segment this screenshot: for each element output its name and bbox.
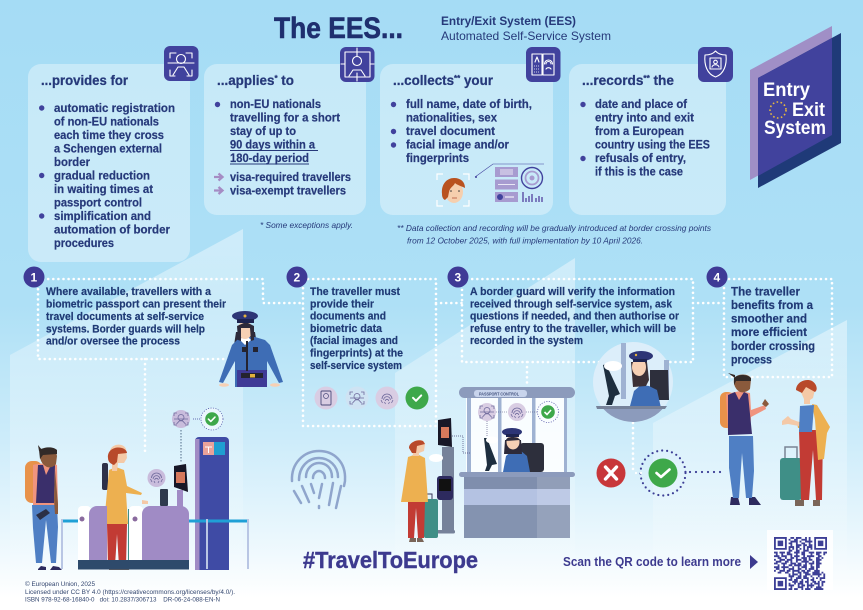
list: applies to: stay of up to	[230, 126, 296, 138]
credits: Licensed under CC BY 4.0 (https://creativecommons.org/licenses/by/4.0/).	[25, 589, 235, 596]
list: provides for	[39, 103, 175, 250]
icon: passport and fingerprint	[526, 47, 560, 82]
list: records: entry into and exit	[595, 112, 694, 124]
step 4: The traveller	[731, 286, 801, 298]
step 4: smoother and	[731, 314, 807, 326]
icon: approval check	[636, 450, 726, 496]
illustration: traveller at gate	[102, 445, 148, 570]
heading: collects: **	[454, 74, 461, 83]
step 1: Where available, travellers with a	[46, 286, 212, 298]
icon: face frame	[340, 47, 374, 82]
list: provides for: of non-EU nationals	[54, 116, 159, 128]
step 3: received through self-service system, ask	[470, 298, 673, 310]
icons: biometric steps	[314, 386, 428, 410]
list: provides for: in waiting times at	[54, 184, 153, 196]
step 4: border crossing	[731, 341, 815, 353]
illustration: face scan and data	[437, 164, 544, 206]
list: records: refusals of entry,	[595, 153, 686, 165]
traveller woman	[780, 380, 830, 506]
list: records	[580, 99, 710, 178]
illustration: border guard	[219, 311, 283, 387]
footnote: implementation dates	[397, 223, 712, 246]
list: applies to: non-EU nationals	[230, 99, 321, 111]
list: provides for: simplification and	[54, 211, 151, 223]
step 3	[448, 266, 680, 347]
icon: approved check	[201, 408, 223, 430]
arrows: travellers: visa-exempt travellers	[230, 186, 346, 198]
step 3: refuse entry to the traveller, which will be	[470, 323, 676, 335]
step 2: biometric data	[310, 323, 383, 335]
step 4: more efficient	[731, 327, 807, 339]
logo: Entry Exit System: Entry	[763, 80, 810, 101]
list: records: if this is the case	[595, 166, 683, 178]
step 2: provide their	[310, 298, 375, 310]
step 3: questions if needed, and then authorise or	[470, 311, 680, 323]
list: collects: fingerprints	[406, 153, 469, 165]
heading: collects: ...collects	[393, 73, 455, 88]
illustration: self-service gate	[62, 408, 248, 570]
footnote: implementation dates: from 12 October 2025, with full implementation by 10 April 2026.	[407, 236, 643, 246]
icon: shield	[698, 47, 733, 82]
step 3: A border guard will verify the information	[470, 286, 675, 298]
list: provides for: each time they cross	[54, 130, 164, 142]
logo: Entry Exit System	[750, 26, 841, 188]
list: collects: facial image and/or	[406, 140, 510, 152]
step 1: travel documents at self-service	[46, 311, 204, 323]
list: provides for: automation of border	[54, 224, 171, 236]
step 1	[24, 266, 227, 348]
logo: Entry Exit System: Exit	[792, 100, 826, 121]
list: records: date and place of	[595, 99, 687, 111]
illustration: happy travellers	[720, 373, 830, 506]
heading: provides for: ...provides for	[41, 73, 129, 88]
list: provides for: a Schengen external	[54, 144, 162, 156]
step 2	[286, 266, 403, 372]
list: provides for: border	[54, 157, 91, 169]
credits	[25, 580, 235, 604]
illustration: passport control booth	[459, 387, 575, 538]
arrows: travellers: visa-required travellers	[230, 172, 351, 184]
heading: records: **	[643, 74, 651, 83]
step 4: process	[731, 354, 772, 366]
heading: applies to: ...applies	[217, 73, 275, 88]
step 2: 2	[294, 270, 300, 284]
list: collects	[391, 99, 532, 165]
icon: refusal X	[596, 458, 626, 488]
background building shapes	[10, 229, 847, 610]
hashtag: #TravelToEurope	[303, 547, 478, 573]
step 3: 3	[454, 270, 462, 284]
step 2: (facial images and	[310, 335, 398, 347]
panel: collects	[380, 64, 553, 215]
tall kiosk column	[195, 437, 229, 570]
step 1: and/or oversee the process	[46, 336, 180, 348]
step 2: documents and	[310, 311, 386, 323]
list: collects: nationalities, sex	[406, 112, 498, 124]
list: applies to: travelling for a short	[230, 112, 340, 124]
list: records: country using the EES	[595, 140, 710, 152]
icon: fingerprint	[292, 451, 345, 508]
subtitle: Entry/Exit System (EES)	[441, 14, 576, 28]
step 3: recorded in the system	[470, 335, 583, 347]
panel: provides for	[28, 64, 190, 262]
QR code	[767, 530, 833, 590]
logo: Entry Exit System: System	[764, 118, 826, 139]
step 1: 1	[30, 270, 38, 284]
illustration: traveller with passport	[25, 445, 62, 570]
traveller man	[720, 373, 769, 505]
icon: face scan	[164, 46, 198, 81]
list: applies to	[215, 99, 340, 165]
step 4: benefits from a	[731, 300, 814, 312]
list: provides for: procedures	[54, 238, 114, 250]
step 1: biometric passport can present their	[46, 298, 227, 310]
list: provides for: passport control	[54, 198, 142, 210]
heading: records: ...records	[582, 73, 643, 88]
list: collects: full name, date of birth,	[406, 99, 532, 111]
credits: © European Union, 2025	[25, 580, 95, 588]
icons: booth checks	[478, 402, 558, 437]
illustration: passport control booth: PASSPORT CONTROL	[479, 392, 519, 396]
title: The EES...	[274, 12, 403, 45]
footnote: implementation dates: ** Data collection and recording will be gradually introduced at border crossing points	[397, 223, 712, 233]
list: provides for: automatic registration	[54, 103, 175, 115]
footnote: exceptions: * Some exceptions apply.	[260, 220, 353, 230]
step 2: fingerprints) at the	[310, 348, 403, 360]
icon: fingerprint bubble	[148, 469, 166, 487]
queue barrier	[62, 519, 248, 569]
arrows: travellers	[214, 172, 351, 198]
list: records: from a European	[595, 126, 684, 138]
QR call to action: Scan the QR code to learn more	[563, 555, 741, 569]
list: applies to: 90 days within a	[230, 140, 316, 152]
heading: applies to: to	[278, 73, 294, 88]
icon: face bubble	[172, 410, 190, 428]
illustration: guard at desk circle	[593, 342, 673, 422]
heading: collects: your	[460, 73, 494, 88]
step 4	[706, 266, 815, 366]
heading: records: the	[650, 73, 674, 88]
dotted connectors	[38, 279, 832, 473]
list: applies to: 180-day period	[230, 153, 309, 165]
illustration: kiosk and traveller	[401, 418, 470, 542]
step 1: systems. Border guards will help	[46, 323, 205, 335]
step 2: The traveller must	[310, 286, 400, 298]
heading: applies to: *	[274, 74, 278, 83]
subtitle	[441, 14, 611, 43]
panel: applies to	[204, 64, 366, 215]
list: collects: travel document	[406, 126, 495, 138]
step 4: 4	[714, 270, 720, 284]
panel: records	[569, 64, 726, 215]
list: provides for: gradual reduction	[54, 170, 150, 182]
step 2: self-service system	[310, 360, 402, 372]
subtitle: Automated Self-Service System	[441, 29, 611, 43]
credits: ISBN 978-92-68-16840-0 doi: 10.2837/306713 DR-06-24-088-EN-N	[25, 596, 220, 604]
